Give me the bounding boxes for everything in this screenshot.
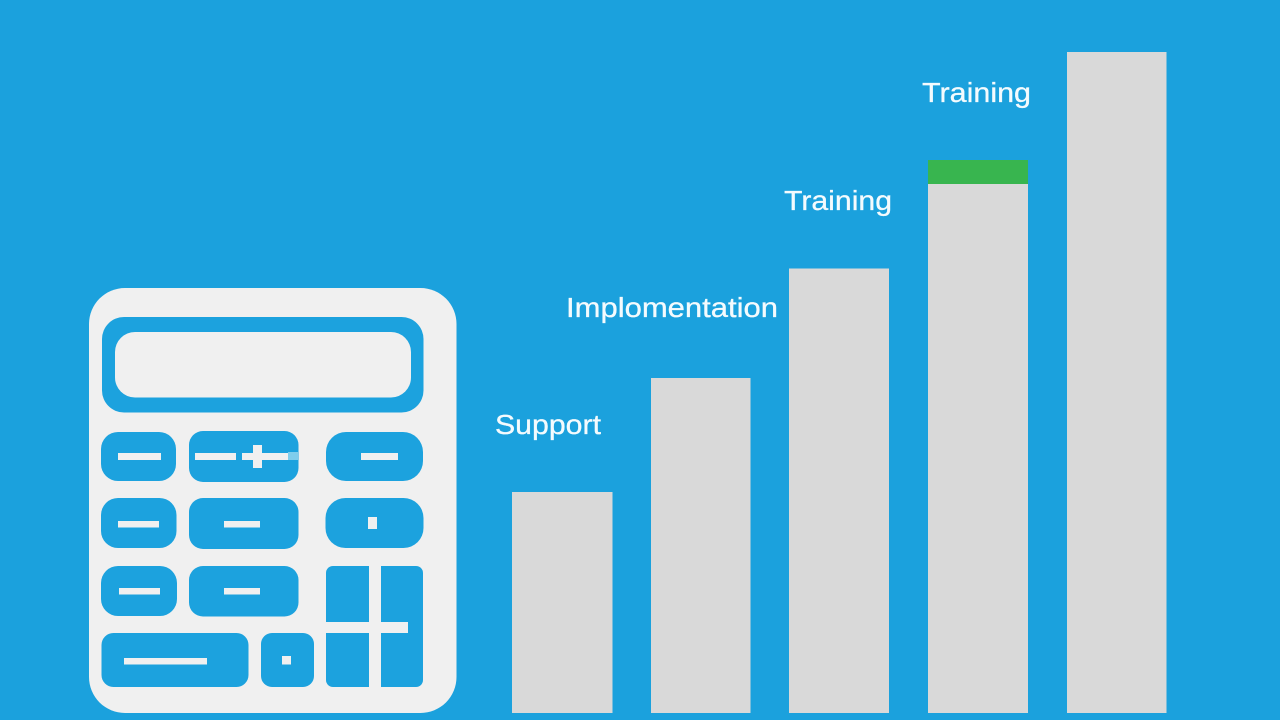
label: Training (bar 3): Training	[784, 185, 892, 216]
label: Implomentation: Implomentation	[566, 292, 778, 323]
bar 1	[512, 492, 612, 713]
calculator display	[102, 317, 424, 412]
icon: calculator	[89, 288, 456, 713]
bar 2	[651, 378, 750, 713]
bar 4	[928, 160, 1028, 713]
label: Support: Support	[495, 409, 601, 440]
calculator body	[89, 288, 456, 713]
bar 5	[1067, 52, 1166, 713]
keypad buttons	[101, 431, 424, 687]
bar chart	[512, 52, 1166, 713]
bar 3	[789, 268, 889, 713]
label: Training (bar 4): Training	[922, 77, 1031, 108]
button symbols	[118, 445, 408, 687]
